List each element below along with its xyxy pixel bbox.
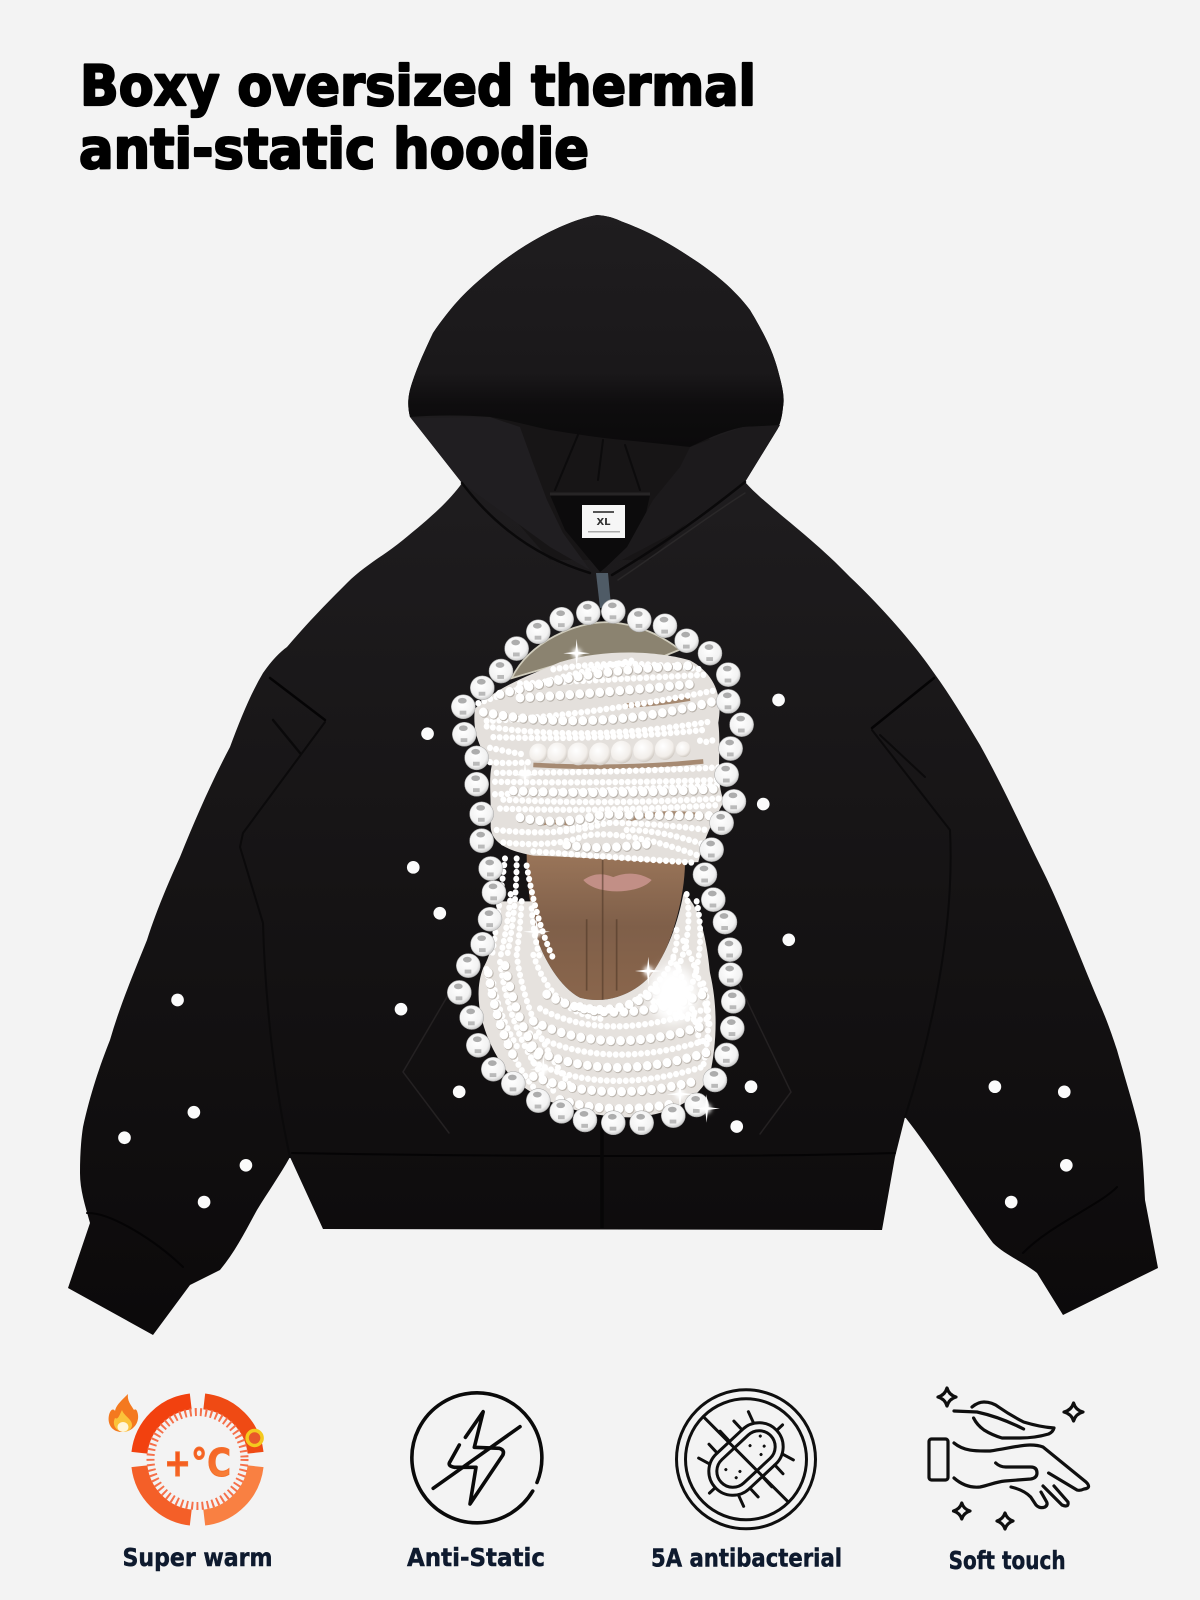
fabric folds and seams [87,430,1117,1267]
head dome [512,622,680,678]
size label [582,505,625,538]
title [79,54,756,181]
face and neck [527,853,685,1000]
left hood flap [411,417,590,570]
hoodie garment [68,215,1158,1335]
bacterium [684,1397,808,1521]
hood inner back panel [480,415,730,560]
icon: super warm [109,1394,262,1518]
thermal ring quadrants [139,1401,256,1518]
tick ring [150,1412,244,1506]
zipper [596,573,611,1228]
label: 5A antibacterial: 5A antibacterial [651,1544,842,1572]
sparkle diamonds [938,1388,1083,1529]
icon: anti-static [412,1393,542,1523]
icon: 5A antibacterial [676,1390,816,1529]
crystal bead ring [447,599,754,1135]
indicator dot [247,1430,262,1446]
lips [583,874,652,891]
sparkles [512,639,720,1123]
title: anti-static hoodie [79,117,589,181]
label: anti-static: Anti-Static [407,1543,545,1572]
hoodie silhouette [68,215,1158,1335]
size label: XL [596,517,611,528]
scattered pearls [118,694,1073,1208]
right hood flap [603,425,780,570]
pearl portrait graphic [447,599,754,1135]
upper pearl wrap [474,653,724,863]
lower pearl necklace mass [479,859,716,1117]
icon: soft touch [929,1388,1089,1529]
title: Boxy oversized thermal [80,54,756,118]
neck shading and zipper line [587,859,617,1001]
flame [109,1394,138,1432]
label: soft touch: Soft touch [949,1546,1066,1575]
hand [954,1443,1089,1490]
hood outer shell [408,215,784,447]
cuff [929,1439,948,1480]
temperature symbol: +°C [164,1441,231,1485]
feather [954,1411,1024,1429]
label: super warm: Super warm [122,1543,272,1572]
collar interior [550,494,650,572]
